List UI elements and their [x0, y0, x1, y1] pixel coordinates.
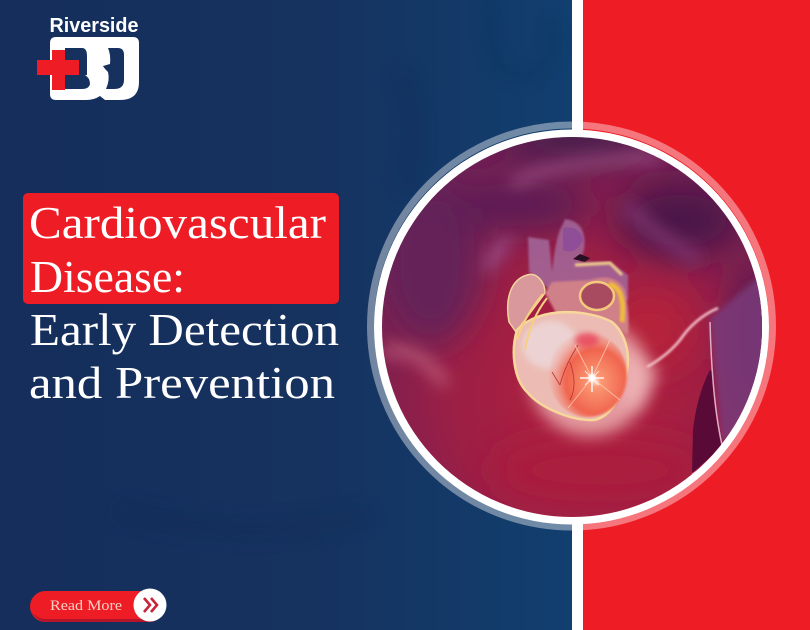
heart upper body: [545, 278, 629, 335]
button label: Read More: [50, 598, 122, 614]
logo: [37, 15, 139, 100]
logo red cross: [37, 50, 79, 90]
great vessels: [528, 219, 628, 300]
logo B counter: [65, 48, 90, 89]
circle: outer translucent ring: [370, 125, 772, 527]
button pill: [30, 591, 161, 622]
left ventricle: [549, 333, 627, 417]
chest contour highlight: [647, 308, 718, 367]
title line 3: Early Detection: [30, 305, 339, 355]
blurred stethoscope background: [120, 0, 552, 529]
heart main body: [514, 312, 628, 420]
panel: blue background: [0, 0, 572, 630]
title line 1: Cardiovascular: [29, 198, 326, 248]
arm: [708, 278, 762, 442]
armpit shadow: [692, 370, 722, 473]
right atrium ring: [580, 282, 614, 310]
logo white block: [50, 37, 139, 100]
title: [29, 198, 339, 408]
read more button: [30, 588, 166, 622]
heart: [508, 219, 660, 436]
white vertical divider: [572, 0, 583, 630]
title highlight box: [23, 193, 339, 304]
heart glow: [530, 320, 650, 436]
panel: red background: [583, 0, 810, 630]
atrium left: [508, 274, 545, 332]
circle: white ring: [374, 130, 769, 524]
logo J counter: [103, 48, 124, 89]
light burst: [568, 340, 620, 408]
title line 4: and Prevention: [29, 358, 335, 408]
circle: chest image: [380, 124, 779, 519]
coronary vessels: [517, 294, 547, 350]
logo wordmark: Riverside: [50, 15, 138, 37]
mottled muscle: [522, 321, 578, 369]
title line 2: Disease:: [30, 252, 185, 302]
button arrow circle: [134, 588, 166, 622]
